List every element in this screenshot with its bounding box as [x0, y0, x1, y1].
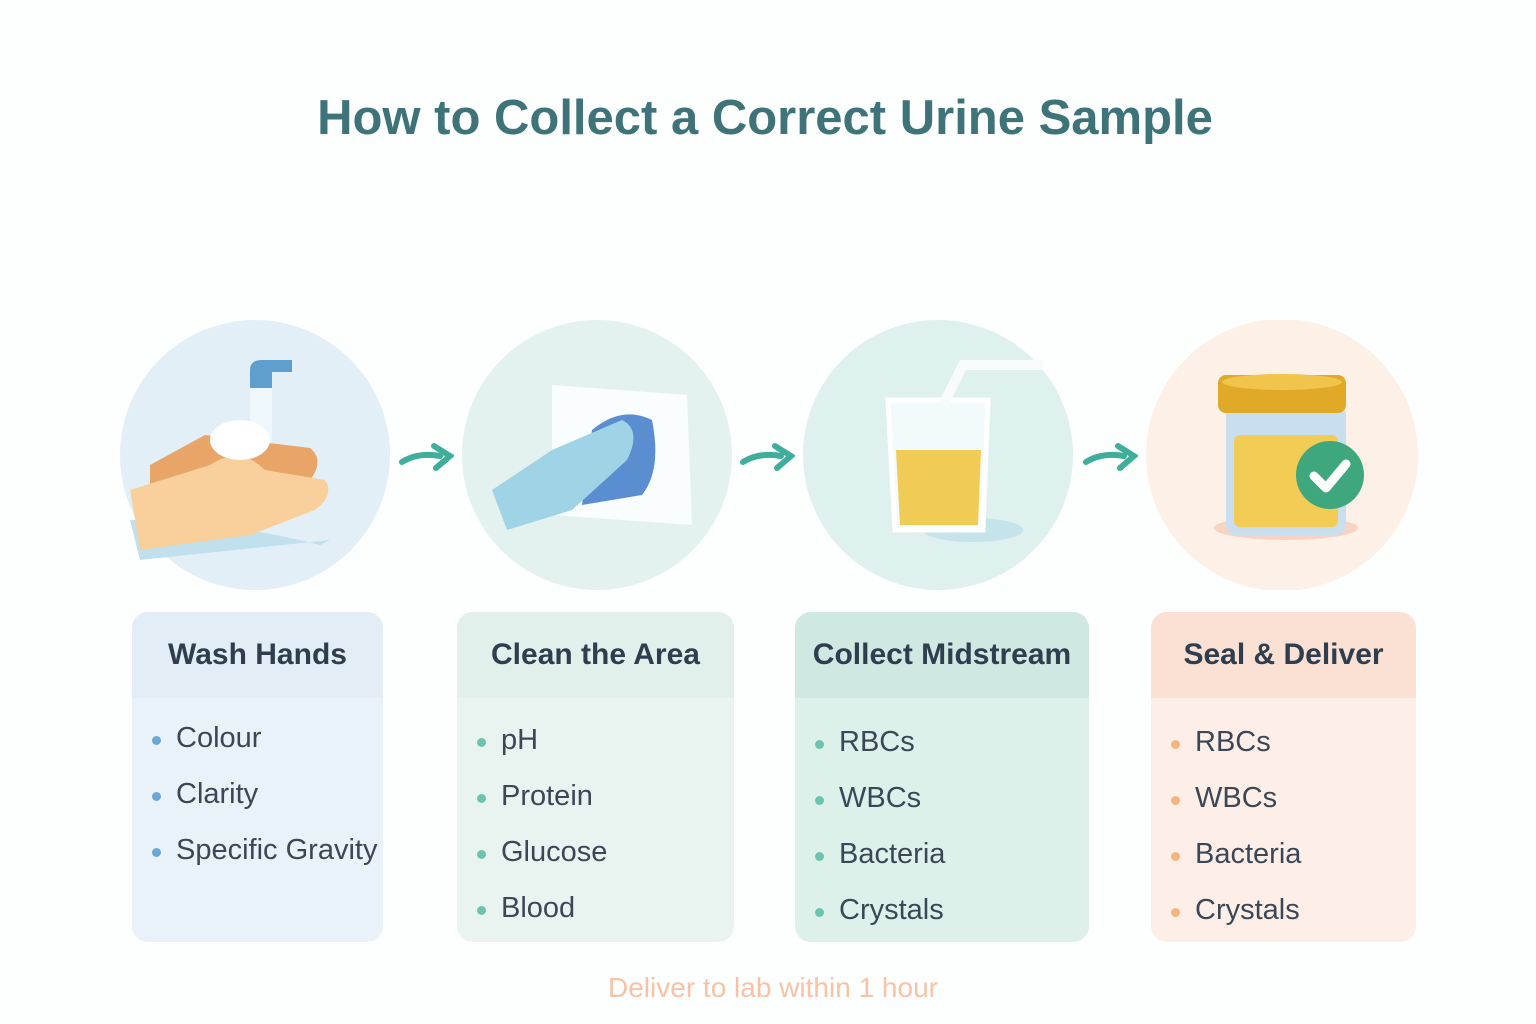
card: clean the area: Glucose	[501, 836, 607, 868]
card: seal & deliver: WBCs	[1195, 782, 1277, 814]
card: collect midstream: Crystals	[839, 894, 944, 926]
card: wash hands: Specific Gravity	[176, 834, 377, 866]
card: wash hands: Colour	[176, 722, 261, 754]
card: collect midstream: RBCs	[839, 726, 915, 758]
icon: sealed jar	[1146, 320, 1418, 590]
card: collect midstream: Bacteria	[839, 838, 945, 870]
card: collect midstream: Collect Midstream	[813, 638, 1071, 671]
footer note: Deliver to lab within 1 hour	[608, 972, 938, 1003]
card: seal & deliver: Seal & Deliver	[1183, 638, 1384, 671]
title: How to Collect a Correct Urine Sample	[317, 91, 1213, 145]
card: wash hands: Clarity	[176, 778, 258, 810]
icon: wash hands	[120, 320, 390, 590]
card: clean the area: pH	[501, 724, 538, 756]
card: collect midstream: WBCs	[839, 782, 921, 814]
card: clean the area: Protein	[501, 780, 593, 812]
arrow 2	[740, 443, 795, 471]
card: clean the area: Blood	[501, 892, 575, 924]
arrow 1	[399, 443, 454, 471]
card: collect midstream	[795, 612, 1089, 942]
card: seal & deliver: RBCs	[1195, 726, 1271, 758]
arrow 3	[1083, 443, 1138, 471]
card: seal & deliver: Crystals	[1195, 894, 1300, 926]
card: clean the area: Clean the Area	[491, 638, 700, 671]
icon: clean area	[462, 320, 732, 590]
card: clean the area	[457, 612, 734, 942]
card: seal & deliver: Bacteria	[1195, 838, 1301, 870]
card: wash hands: Wash Hands	[168, 638, 347, 671]
card: seal & deliver	[1151, 612, 1416, 942]
icon: collect midstream	[803, 320, 1073, 590]
card: wash hands	[132, 612, 383, 942]
